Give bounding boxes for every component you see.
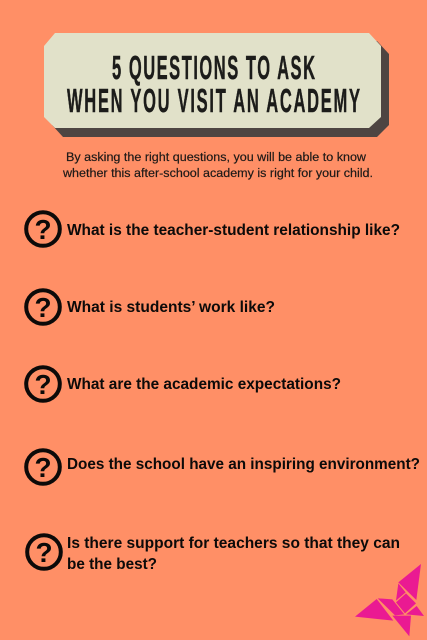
title banner — [44, 33, 389, 137]
icon: pink origami bird logo — [355, 564, 424, 636]
icon: question mark — [26, 450, 60, 484]
icon: question mark — [26, 212, 60, 246]
question 4 text: Does the school have an inspiring environment? — [67, 456, 420, 473]
question 3 — [26, 367, 341, 401]
question 1 text: What is the teacher-student relationship like? — [67, 222, 400, 239]
title: WHEN YOU VISIT AN ACADEMY — [67, 82, 360, 120]
question 2 — [26, 290, 275, 324]
title — [67, 49, 360, 120]
question 3 text: What are the academic expectations? — [67, 376, 341, 393]
icon: question mark — [26, 290, 60, 324]
icon: question mark: ? — [34, 452, 52, 483]
icon: question mark: ? — [34, 292, 52, 323]
question 5 text — [67, 535, 400, 573]
intro text: whether this after-school academy is right for your child. — [62, 166, 373, 180]
title: 5 QUESTIONS TO ASK — [112, 49, 315, 87]
icon: question mark: ? — [34, 214, 52, 245]
question 5 text: Is there support for teachers so that they can — [67, 535, 400, 552]
question 4 — [26, 450, 420, 484]
icon: question mark: ? — [34, 369, 52, 400]
question 1 — [26, 212, 400, 246]
question 5 text: be the best? — [67, 556, 157, 573]
intro text: By asking the right questions, you will be able to know — [66, 150, 366, 164]
question 2 text: What is students’ work like? — [67, 299, 275, 316]
icon: question mark — [27, 535, 61, 569]
question 5 — [27, 535, 400, 573]
icon: question mark: ? — [35, 537, 53, 568]
icon: question mark — [26, 367, 60, 401]
intro text — [62, 150, 373, 180]
